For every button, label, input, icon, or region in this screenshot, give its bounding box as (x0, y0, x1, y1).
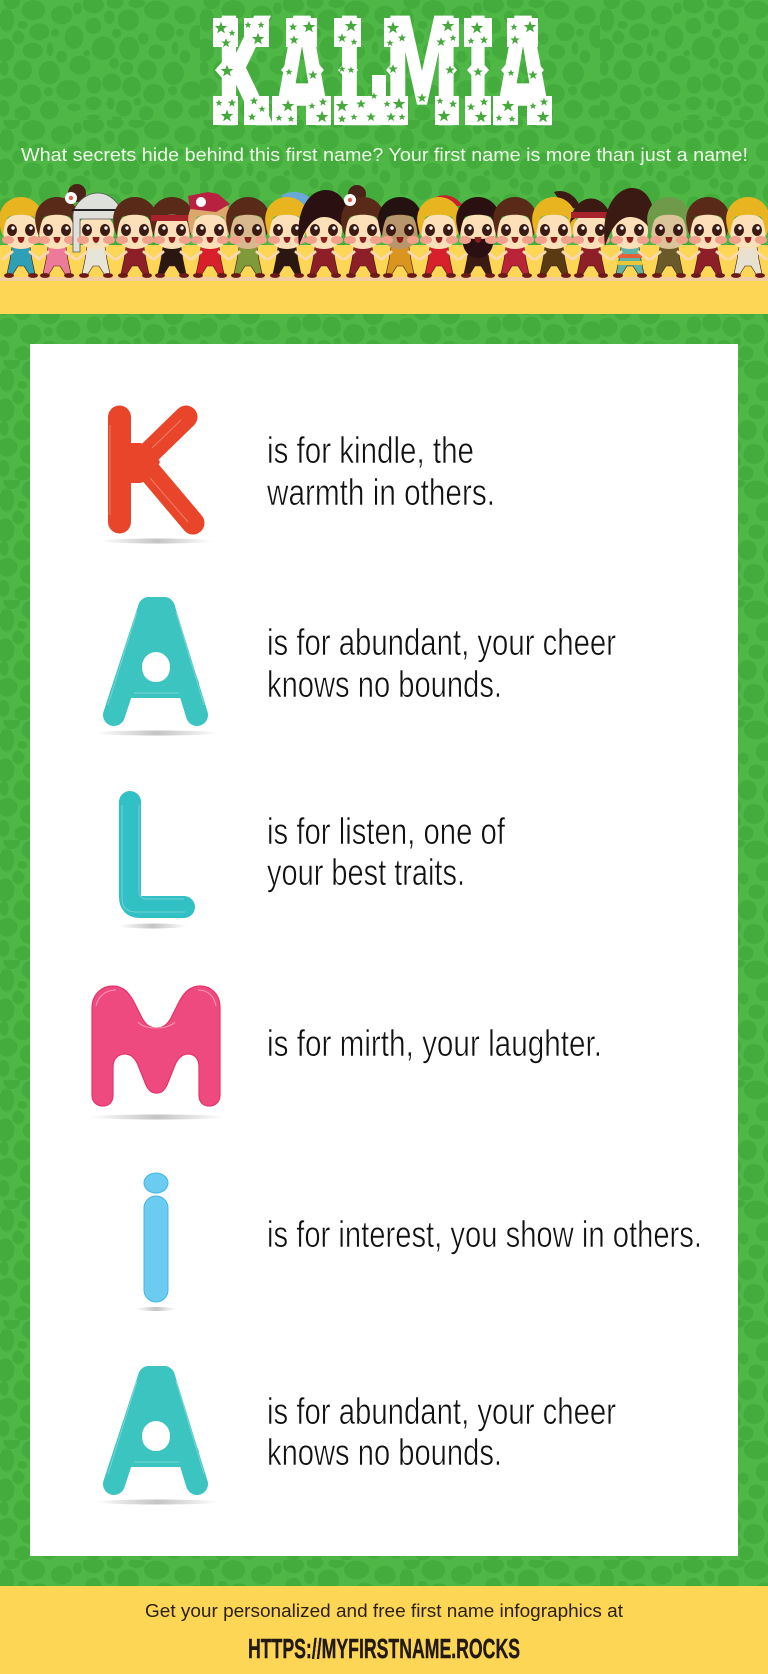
child 3 (72, 193, 122, 278)
letter A (second) (95, 1377, 219, 1504)
child 20 (726, 197, 768, 278)
text: K line: warmth in others. (266, 472, 495, 513)
child 19 (686, 197, 730, 278)
child 5 (150, 197, 194, 278)
footer url: HTTPS://MYFIRSTNAME.ROCKS (248, 1633, 520, 1664)
child 7 (226, 197, 270, 278)
text: M line: is for mirth, your laughter. (267, 1023, 602, 1064)
text: second A line (267, 1391, 616, 1473)
text: K line: is for kindle, the (267, 430, 474, 471)
letter A (95, 608, 219, 736)
child 18 (647, 197, 691, 278)
white content panel (30, 344, 738, 1556)
row of cartoon children (0, 184, 768, 278)
child 17 (604, 188, 655, 278)
child 13 (456, 197, 500, 278)
letter K (101, 417, 213, 544)
child 16 (570, 198, 612, 278)
text: L line (267, 811, 506, 893)
text: A line: is for abundant, your cheer (267, 622, 616, 663)
title (213, 0, 552, 159)
text: L line: is for listen, one of (267, 811, 506, 852)
child 8 (265, 192, 317, 278)
letter L (119, 802, 187, 928)
text: second A line: knows no bounds. (267, 1432, 502, 1473)
footer text: Get your personalized and free first name infographics at (145, 1600, 623, 1621)
letter M (89, 986, 225, 1120)
child 9 (298, 190, 349, 278)
child 2 (35, 184, 86, 278)
text: second A line: is for abundant, your cheer (267, 1391, 616, 1432)
subtitle: What secrets hide behind this first name? Your first name is more than just a name! (21, 144, 748, 165)
letter i (136, 1173, 176, 1311)
child 6 (188, 192, 232, 278)
text: A line: knows no bounds. (267, 664, 502, 705)
child 1 (0, 197, 43, 278)
child 15 (532, 191, 580, 278)
child 4 (113, 197, 157, 278)
footer (0, 1586, 768, 1674)
text: A line (267, 622, 616, 705)
yellow band (0, 245, 768, 314)
text: K line (266, 430, 495, 513)
text: L line: your best traits. (267, 852, 465, 893)
child 11 (378, 197, 422, 278)
child 14 (493, 197, 537, 278)
child 12 (417, 195, 463, 278)
child 10 (341, 185, 385, 278)
